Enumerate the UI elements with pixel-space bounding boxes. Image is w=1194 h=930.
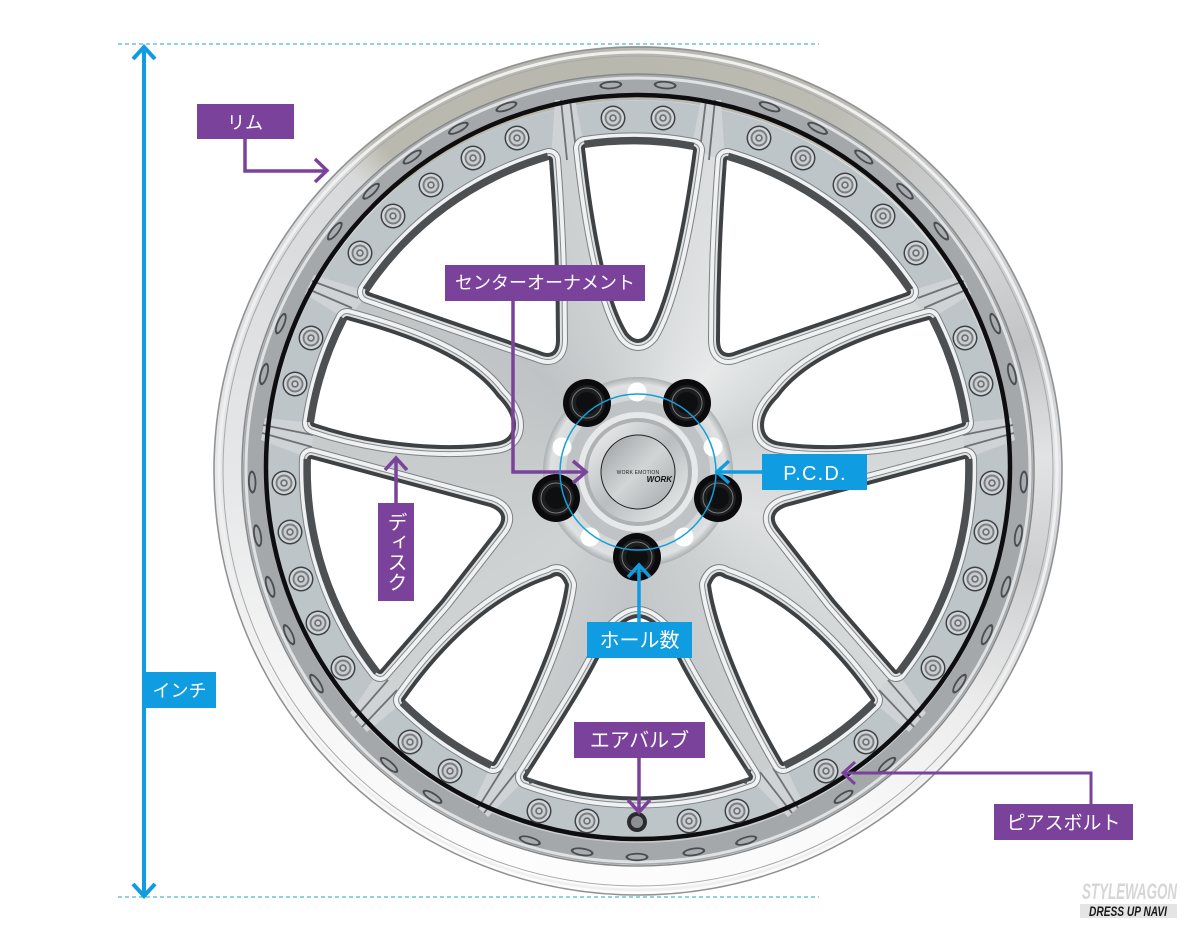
label: air valve: エアバルブ [590,728,689,752]
spoke ends [261,100,1015,817]
arrow: pierce bolt [843,762,1091,804]
logo: StyleWagon [1080,879,1178,919]
label: inch: インチ [152,681,206,701]
label: pierce bolt [994,804,1133,840]
center ornament [584,418,692,526]
hub dish [543,377,733,567]
wheel windows with bevels [311,144,965,796]
label: hole count [587,622,692,658]
pierce bolts [272,106,1004,834]
label: inch [143,672,216,708]
label: rim [197,104,294,139]
arrow: hole count [628,565,650,622]
air valve [627,812,647,832]
arrow: rim [245,139,327,182]
label: center ornament: センターオーナメント [455,273,635,293]
bottom dashed guide [118,896,819,898]
logo: StyleWagon: DRESS UP NAVI [1089,904,1167,919]
label: PCD [762,454,867,490]
bolt holes [552,382,722,546]
arrow: PCD [717,461,762,483]
arrow: disc [385,458,407,503]
label: disc [378,503,414,601]
rim lip lines [214,47,1062,895]
center ornament: WORK [647,475,673,484]
center ornament: WORK EMOTION [617,470,660,476]
label: hole count: ホール数 [600,629,680,652]
label: PCD: P.C.D. [783,463,847,485]
PCD circle [560,394,716,550]
arrow: center ornament [513,301,586,483]
arrow: inch dimension [133,47,155,896]
arrow: air valve [628,758,650,812]
label: disc: ディスク [384,512,406,592]
label: center ornament [445,265,645,301]
rim barrel bolt heads [248,80,1028,861]
lug nuts [532,379,742,581]
black rim seam [266,95,1010,839]
label: pierce bolt: ピアスボルト [1006,812,1121,834]
label: air valve [574,722,705,758]
label: rim: リム [227,113,263,133]
top dashed guide [118,43,819,45]
